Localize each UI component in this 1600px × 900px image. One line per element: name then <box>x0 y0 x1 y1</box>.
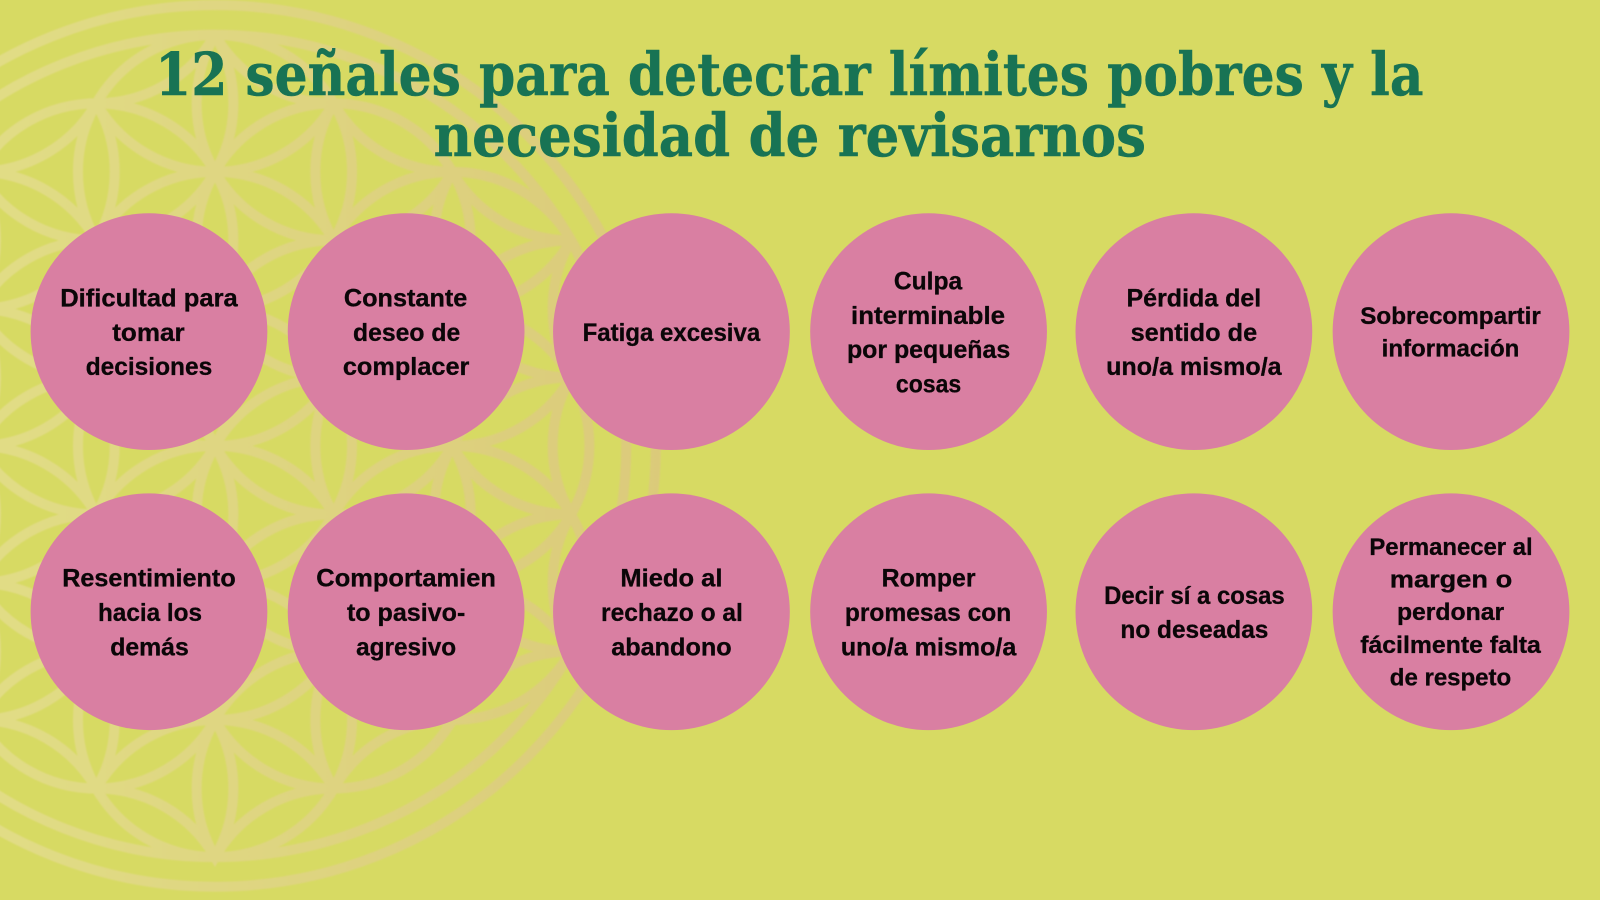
flower of life background pattern <box>0 0 714 900</box>
sign 10: Romper promesas con uno/a mismo/a: Romper <box>882 565 976 593</box>
sign 4: Culpa interminable por pequeñas cosas: interminable <box>851 302 1005 330</box>
sign 8: Comportamiento pasivo-agresivo: to pasivo- <box>347 599 465 627</box>
sign 5: Pérdida del sentido de uno/a mismo/a <box>1076 213 1312 450</box>
sign 2: Constante deseo de complacer: Constante <box>344 285 467 313</box>
sign 4: Culpa interminable por pequeñas cosas <box>810 213 1047 450</box>
sign 8: Comportamiento pasivo-agresivo <box>288 493 524 730</box>
sign 7: Resentimiento hacia los demás: Resentimiento <box>62 565 236 593</box>
title <box>155 39 1423 170</box>
sign 10: Romper promesas con uno/a mismo/a: uno/a mismo/a <box>841 633 1017 661</box>
sign 6: Sobrecompartir información: Sobrecompartir <box>1360 303 1541 330</box>
sign 7: Resentimiento hacia los demás: demás <box>110 633 189 661</box>
sign 6: Sobrecompartir información <box>1333 213 1569 450</box>
sign 12: Permanecer al margen o perdonar fácilmente falta de respeto: Permanecer al <box>1369 534 1533 561</box>
sign 12: Permanecer al margen o perdonar fácilmente falta de respeto: margen o <box>1390 567 1512 594</box>
sign 2: Constante deseo de complacer <box>288 213 524 450</box>
title: necesidad de revisarnos <box>434 100 1146 170</box>
sign 10: Romper promesas con uno/a mismo/a: promesas con <box>845 599 1011 627</box>
sign 8: Comportamiento pasivo-agresivo: agresivo <box>356 633 456 661</box>
sign 1: Dificultad para tomar decisiones: tomar <box>112 319 185 347</box>
sign 3: Fatiga excesiva: Fatiga excesiva <box>583 319 761 347</box>
sign 7: Resentimiento hacia los demás <box>31 493 267 730</box>
title: 12 señales para detectar límites pobres y la <box>155 39 1423 109</box>
sign 12: Permanecer al margen o perdonar fácilmente falta de respeto <box>1333 493 1569 730</box>
sign 2: Constante deseo de complacer: deseo de <box>353 319 460 347</box>
sign 4: Culpa interminable por pequeñas cosas: por pequeñas <box>847 336 1010 364</box>
sign 9: Miedo al rechazo o al abandono <box>553 493 790 730</box>
sign 12: Permanecer al margen o perdonar fácilmente falta de respeto: de respeto <box>1390 665 1511 692</box>
sign 3: Fatiga excesiva <box>553 213 790 450</box>
sign 1: Dificultad para tomar decisiones: decisiones <box>86 353 212 381</box>
sign 5: Pérdida del sentido de uno/a mismo/a: Pérdida del <box>1127 285 1261 313</box>
sign 6: Sobrecompartir información: información <box>1382 335 1519 362</box>
sign 1: Dificultad para tomar decisiones <box>31 213 267 450</box>
sign 5: Pérdida del sentido de uno/a mismo/a: uno/a mismo/a <box>1106 353 1283 381</box>
sign 5: Pérdida del sentido de uno/a mismo/a: sentido de <box>1131 319 1257 347</box>
sign 4: Culpa interminable por pequeñas cosas: Culpa <box>894 267 963 295</box>
sign 8: Comportamiento pasivo-agresivo: Comportamien <box>316 565 496 593</box>
sign 4: Culpa interminable por pequeñas cosas: cosas <box>896 370 961 398</box>
sign 12: Permanecer al margen o perdonar fácilmente falta de respeto: fácilmente falta <box>1360 632 1542 659</box>
sign 9: Miedo al rechazo o al abandono: Miedo al <box>620 565 722 593</box>
sign 10: Romper promesas con uno/a mismo/a <box>810 493 1047 730</box>
sign 7: Resentimiento hacia los demás: hacia los <box>98 599 202 627</box>
sign 12: Permanecer al margen o perdonar fácilmente falta de respeto: perdonar <box>1397 599 1504 626</box>
sign 9: Miedo al rechazo o al abandono: rechazo o al <box>601 599 743 627</box>
sign 1: Dificultad para tomar decisiones: Dificultad para <box>60 285 239 313</box>
sign 11: Decir sí a cosas no deseadas <box>1076 493 1312 730</box>
sign 2: Constante deseo de complacer: complacer <box>343 353 470 381</box>
sign 11: Decir sí a cosas no deseadas: Decir sí a cosas <box>1104 582 1285 610</box>
sign 11: Decir sí a cosas no deseadas: no deseadas <box>1120 616 1268 644</box>
sign 9: Miedo al rechazo o al abandono: abandono <box>611 633 732 661</box>
